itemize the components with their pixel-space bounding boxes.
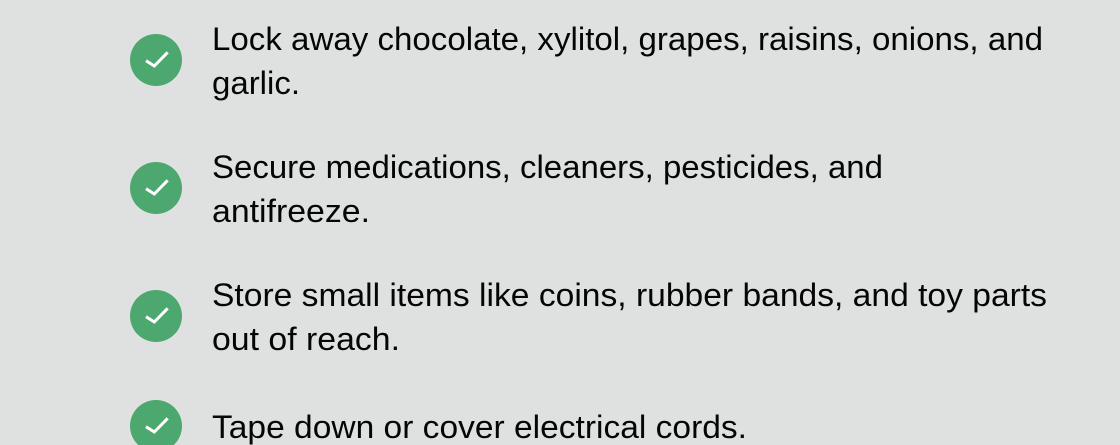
text: item 1 <box>212 21 1043 101</box>
icon: check 1 <box>130 34 182 86</box>
text: item 3 <box>212 277 1047 357</box>
icon: check 2 <box>130 162 182 214</box>
text: item 2: antifreeze. <box>212 193 370 229</box>
icon: check 3 <box>130 290 182 342</box>
text: item 1: garlic. <box>212 65 300 101</box>
text: item 2: Secure medications, cleaners, pesticides, and <box>212 149 883 185</box>
icon: check 4 <box>130 400 182 445</box>
text: item 3: out of reach. <box>212 321 400 357</box>
text: item 1: Lock away chocolate, xylitol, grapes, raisins, onions, and <box>212 21 1043 57</box>
text: item 3: Store small items like coins, rubber bands, and toy parts <box>212 277 1047 313</box>
text: item 2 <box>212 149 883 229</box>
text: item 4: Tape down or cover electrical cords. <box>212 409 747 445</box>
